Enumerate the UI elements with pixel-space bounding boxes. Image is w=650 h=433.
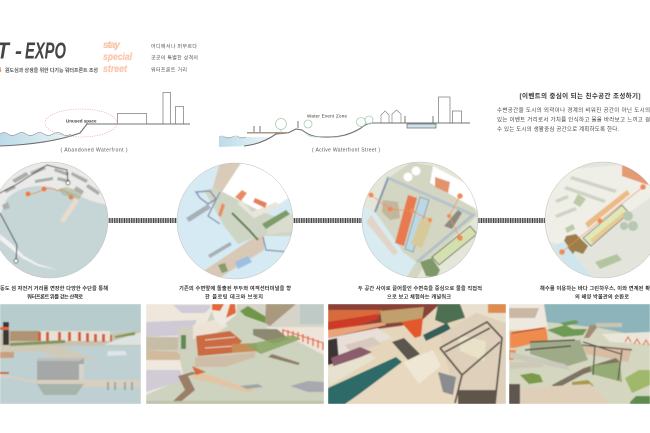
slogan: stay special street: stay (103, 40, 120, 51)
map caption 1: 워터프론트 위를 걷는 산책로 (27, 292, 83, 300)
rendering 1: waterfront elevation (0, 304, 141, 404)
slogan description: 워터프론트 거리 (151, 66, 187, 74)
caption: abandoned waterfront: ( Abandoned Waterfront ) (60, 148, 128, 154)
map circle 4: greenhouse circuit (545, 162, 650, 281)
section diagram: active waterfront street: Water Event Zone (307, 114, 347, 118)
rendering 3: canal walk aerial (328, 304, 506, 404)
map circle 1: promenade (0, 162, 108, 278)
map caption 4: 해수를 이용하는 바다 그린하우스, 이와 연계된 확 (540, 284, 650, 292)
concept paragraph: 있는 이벤트 거리로서 가치를 인식하고 물을 바라보고 느끼고 걸 (497, 116, 650, 124)
rendering 2: aerial of terminal (146, 304, 324, 404)
section diagram: active waterfront street (219, 97, 470, 147)
connector 3 (477, 218, 545, 223)
concept paragraph: 수 있는 도시의 생활중심 공간으로 계획하도록 한다. (497, 125, 619, 133)
map caption 3: 두 공간 사이로 끌어들인 수변축을 중심으로 물을 직접적 (358, 284, 482, 292)
map caption 4: 의 해양 박물관의 순환로 (575, 292, 629, 300)
slogan: stay special street: street (103, 64, 128, 75)
connector 2 (293, 218, 362, 223)
heading: waterfront concept: [이벤트의 중심이 되는 친수공간 조성하기] (520, 91, 640, 100)
map circle 3: canal walk (362, 162, 478, 280)
slogan description: 곳곳의 특별한 성격의 (151, 54, 198, 62)
map caption 2: 기존의 수변앞에 돌출된 부두와 여객선터미널을 향 (179, 284, 291, 292)
concept paragraph: 수변공간을 도시의 외곽이나 경계의 비워진 공간이 아닌 도시의 (497, 106, 650, 114)
slogan: stay special street: special (103, 52, 132, 63)
map caption 2 (179, 284, 291, 300)
slogan description: 어디에서나 머무르다 (151, 43, 197, 50)
map caption 3 (358, 284, 482, 300)
map circle 2: floating deck and bridge (177, 163, 293, 282)
caption: active waterfront street: ( Active Waterfront Street ) (312, 148, 380, 154)
concept paragraph (497, 106, 650, 133)
title: EXPO (25, 38, 66, 64)
title: - (15, 38, 22, 64)
map caption 2: 한 플로팅 데크와 브릿지 (205, 292, 263, 300)
map caption 4 (540, 284, 650, 300)
map caption 1 (0, 284, 108, 300)
map caption 3: 으로 보고 체험하는 캐널워크 (387, 292, 451, 300)
connector 1 (108, 218, 177, 223)
map caption 1: 동도 섬 자전거 거리를 연장한 다양한 수단을 통해 (0, 284, 108, 292)
title (0, 38, 66, 64)
section diagram: abandoned waterfront (0, 92, 190, 146)
rendering 4: greenhouse aerial (509, 304, 650, 404)
slogan description (151, 43, 198, 74)
section diagram: abandoned waterfront: Unused space (66, 118, 97, 124)
slogan: stay special street (103, 40, 132, 75)
subtitle: 원도심과 상생을 위한 다기능 워터프론트 조성 (5, 67, 98, 74)
